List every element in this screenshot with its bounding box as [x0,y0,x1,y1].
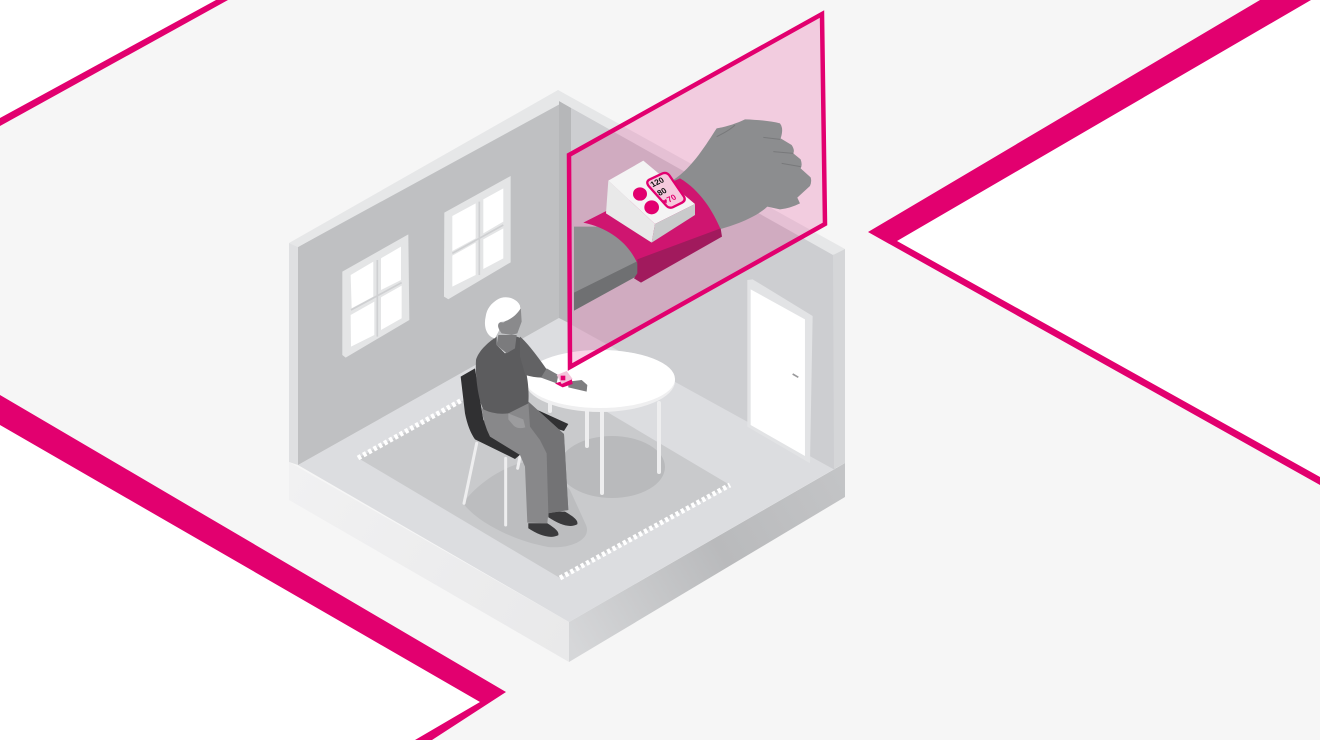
platform left face [289,462,569,662]
chair [461,368,568,525]
floor [298,318,836,622]
magnified panel [569,14,825,367]
chair shadow [463,460,587,547]
cuff [583,178,721,263]
monitor [606,161,695,243]
hair [485,297,521,338]
monitor: ♥70 [661,193,679,206]
neck [497,335,517,353]
monitor: 80 [655,186,669,198]
magenta outline: top left [0,0,228,126]
forearm [574,227,660,311]
upper arm [520,337,547,378]
right wall [558,90,845,470]
trousers [482,402,568,523]
face [496,306,522,335]
table shadow [559,436,665,498]
panel glass [569,14,825,367]
table [525,350,675,493]
rug [358,365,730,578]
forearm [541,368,558,383]
hand [568,380,587,392]
lap hand [508,413,525,428]
monitor screen [647,173,685,208]
magenta outline: right chevron [868,0,1320,485]
fist [673,119,811,230]
magenta outline: lower left chevron [0,395,506,740]
window left [342,234,409,358]
room [289,90,845,662]
platform right face [569,463,845,662]
monitor: 120 [649,175,666,189]
rug dashes [358,400,730,578]
left wall [289,90,571,465]
torso [476,336,529,414]
mini monitor [555,371,573,387]
door [747,279,813,463]
window right [444,176,511,299]
panel frame [569,14,825,367]
shoes [548,512,577,526]
person [476,297,587,537]
